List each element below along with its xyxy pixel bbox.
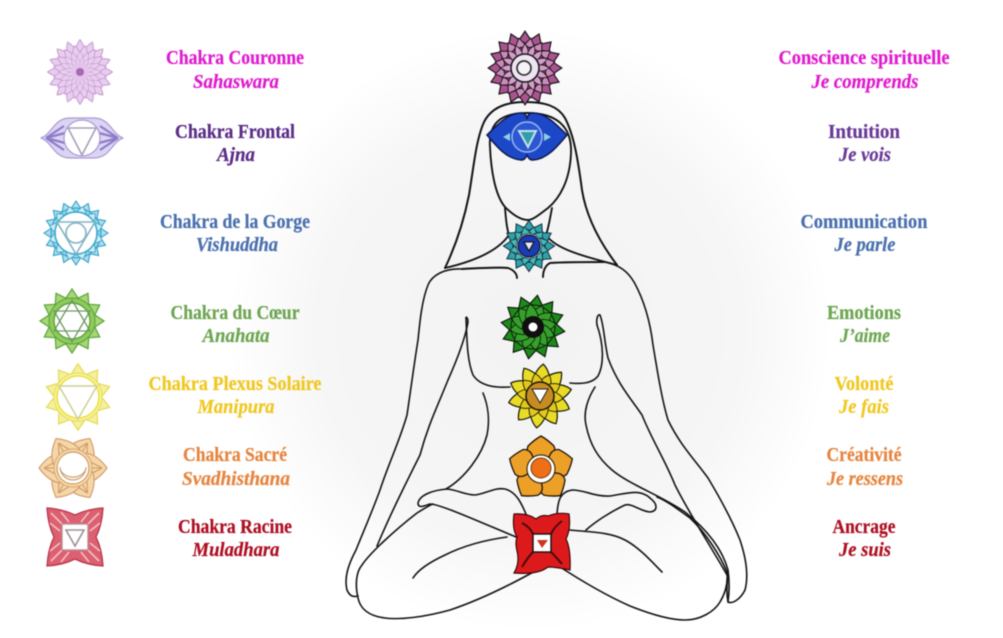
label: intuition <box>828 121 900 166</box>
left thigh <box>356 504 537 619</box>
label: emotions: J’aime <box>839 325 890 347</box>
neck and shoulder lines <box>445 208 617 268</box>
label: spiritual consciousness <box>778 47 950 93</box>
label: emotions: Emotions <box>827 302 901 324</box>
label: root: Chakra Racine <box>178 516 292 538</box>
face <box>490 113 571 220</box>
left shin <box>413 537 507 578</box>
label: communication: Communication <box>800 211 928 233</box>
central chakra: crown lotus <box>487 30 563 106</box>
left arm outer <box>346 269 462 596</box>
label: sacral: Svadhisthana <box>182 468 290 490</box>
icon: root chakra symbol <box>47 508 103 566</box>
label: throat: Chakra de la Gorge <box>160 211 310 233</box>
seated figure outline <box>346 102 747 620</box>
central chakra: sacral <box>505 436 577 504</box>
label: third eye: Ajna <box>215 144 255 166</box>
label: creativity <box>826 444 903 490</box>
label: sacral <box>182 444 290 490</box>
central chakra: heart <box>497 291 569 363</box>
label: solar plexus: Chakra Plexus Solaire <box>148 373 322 395</box>
label: heart: Anahata <box>201 325 270 347</box>
left breast line <box>466 318 510 387</box>
right foot <box>557 490 656 530</box>
hair <box>445 102 617 268</box>
central chakra: root <box>513 513 570 573</box>
label: spiritual consciousness: Je comprends <box>811 71 919 93</box>
right arm outer <box>605 262 747 602</box>
central chakra: solar plexus <box>504 361 576 431</box>
right thigh <box>557 497 727 620</box>
central chakra: third eye <box>487 113 567 160</box>
label: solar plexus: Manipura <box>197 396 274 418</box>
left waist <box>446 393 488 489</box>
icon: third eye chakra symbol <box>41 118 123 158</box>
icon: crown chakra symbol <box>48 40 112 104</box>
right inner arm <box>597 315 727 575</box>
label: creativity: Créativité <box>826 444 902 466</box>
icon: solar plexus chakra symbol <box>44 364 112 430</box>
label: heart <box>170 302 300 347</box>
label: crown: Chakra Couronne <box>166 47 304 69</box>
label: communication <box>800 211 928 256</box>
left labels: chakra names <box>148 47 322 561</box>
right waist <box>585 387 729 602</box>
label: grounding: Je suis <box>838 539 891 561</box>
icon: sacral chakra symbol <box>24 420 122 516</box>
label: creativity: Je ressens <box>826 468 903 490</box>
label: heart: Chakra du Cœur <box>170 302 300 324</box>
label: sacral: Chakra Sacré <box>183 444 287 466</box>
right labels: qualities <box>778 47 950 561</box>
label: will <box>834 373 894 418</box>
icon: heart chakra symbol <box>40 289 104 353</box>
right shin <box>570 530 662 572</box>
label: grounding: Ancrage <box>832 516 896 538</box>
label: will: Je fais <box>838 396 889 418</box>
icon: throat chakra symbol <box>42 199 110 267</box>
label: crown <box>166 47 304 93</box>
label: crown: Sahaswara <box>193 71 279 93</box>
label: root <box>178 516 292 561</box>
label: third eye: Chakra Frontal <box>175 121 295 143</box>
label: emotions <box>827 302 901 347</box>
label: third eye <box>175 121 295 166</box>
label: spiritual consciousness: Conscience spirituelle <box>778 47 950 69</box>
left inner arm <box>377 317 468 546</box>
label: grounding <box>832 516 896 561</box>
label: throat <box>160 211 310 256</box>
label: solar plexus <box>148 373 322 418</box>
label: intuition: Intuition <box>828 121 900 143</box>
label: throat: Vishuddha <box>196 234 278 256</box>
label: root: Muladhara <box>192 539 280 561</box>
label: communication: Je parle <box>834 234 896 256</box>
central chakra: throat <box>503 220 555 272</box>
label: will: Volonté <box>834 373 894 395</box>
left foot <box>418 489 526 537</box>
right breast line <box>570 325 602 383</box>
label: intuition: Je vois <box>838 144 891 166</box>
